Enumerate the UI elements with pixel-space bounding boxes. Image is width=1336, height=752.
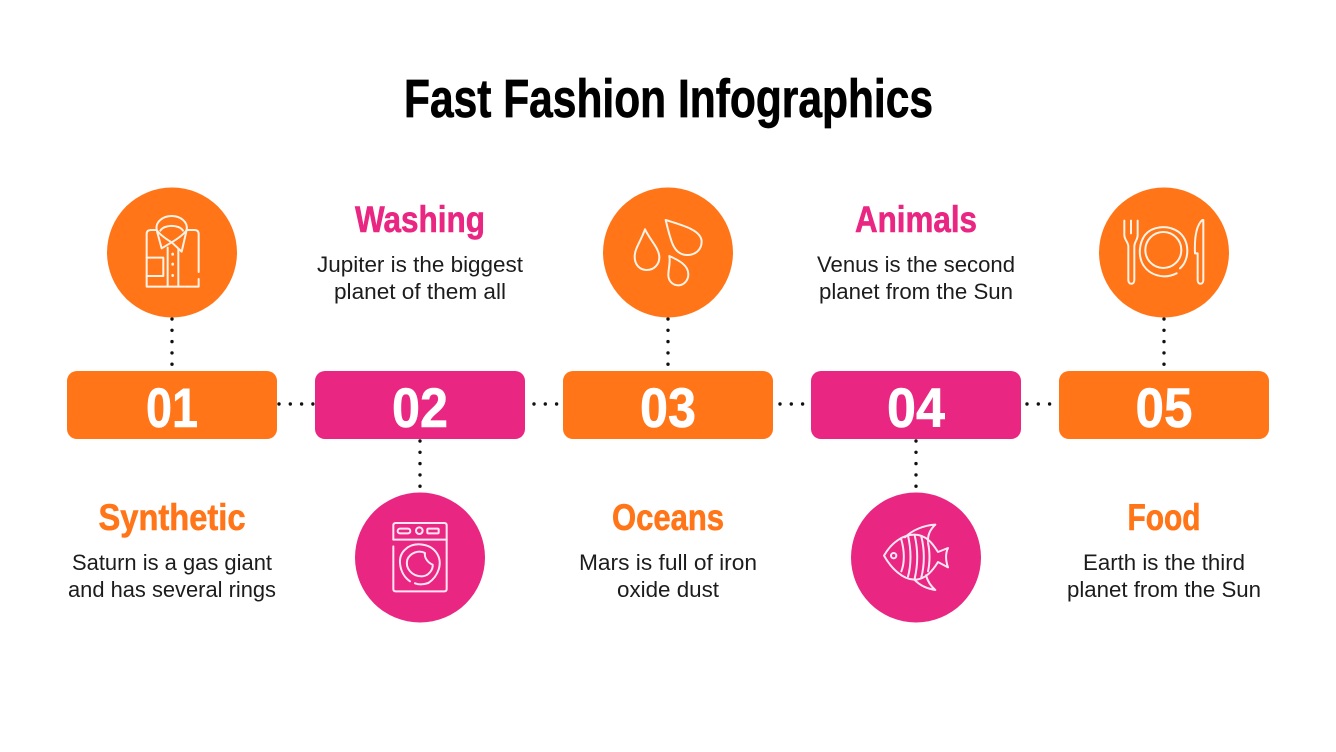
icon: washing machine	[355, 492, 485, 622]
icon: fish	[851, 492, 981, 622]
text: Washing: planet of them all	[334, 279, 506, 304]
text: Synthetic: and has several rings	[68, 577, 276, 602]
step 04 bar: 04	[887, 376, 945, 439]
text: Animals: Animals	[855, 199, 977, 240]
text: Synthetic: Saturn is a gas giant	[72, 550, 272, 575]
dotted connectors	[172, 319, 1164, 487]
text: Synthetic	[68, 497, 276, 602]
title: Fast Fashion Infographics	[404, 69, 933, 129]
step 03 bar: 03	[640, 376, 696, 439]
text: Animals	[817, 199, 1015, 304]
text: Synthetic: Synthetic	[98, 497, 246, 538]
step 05 bar: 05	[1136, 376, 1192, 439]
text: Washing	[317, 199, 523, 304]
text: Oceans: Oceans	[612, 497, 724, 538]
text: Food: Food	[1128, 497, 1200, 538]
text: Food: Earth is the third	[1083, 550, 1245, 575]
step 01 bar: 01	[146, 376, 198, 439]
step 03 bar	[563, 371, 773, 439]
icon: plate with fork and knife	[1099, 188, 1229, 318]
text: Food	[1067, 497, 1261, 602]
step 02 bar	[315, 371, 525, 439]
text: Oceans	[579, 497, 757, 602]
step 02 bar: 02	[392, 376, 448, 439]
step 04 bar	[811, 371, 1021, 439]
text: Animals: Venus is the second	[817, 252, 1015, 277]
icon: water drops	[603, 188, 733, 318]
text: Animals: planet from the Sun	[819, 279, 1013, 304]
text: Washing: Washing	[355, 199, 485, 240]
step 05 bar	[1059, 371, 1269, 439]
step 01 bar	[67, 371, 277, 439]
text: Food: planet from the Sun	[1067, 577, 1261, 602]
text: Washing: Jupiter is the biggest	[317, 252, 523, 277]
text: Oceans: oxide dust	[617, 577, 719, 602]
text: Oceans: Mars is full of iron	[579, 550, 757, 575]
icon: shirt	[107, 188, 237, 318]
